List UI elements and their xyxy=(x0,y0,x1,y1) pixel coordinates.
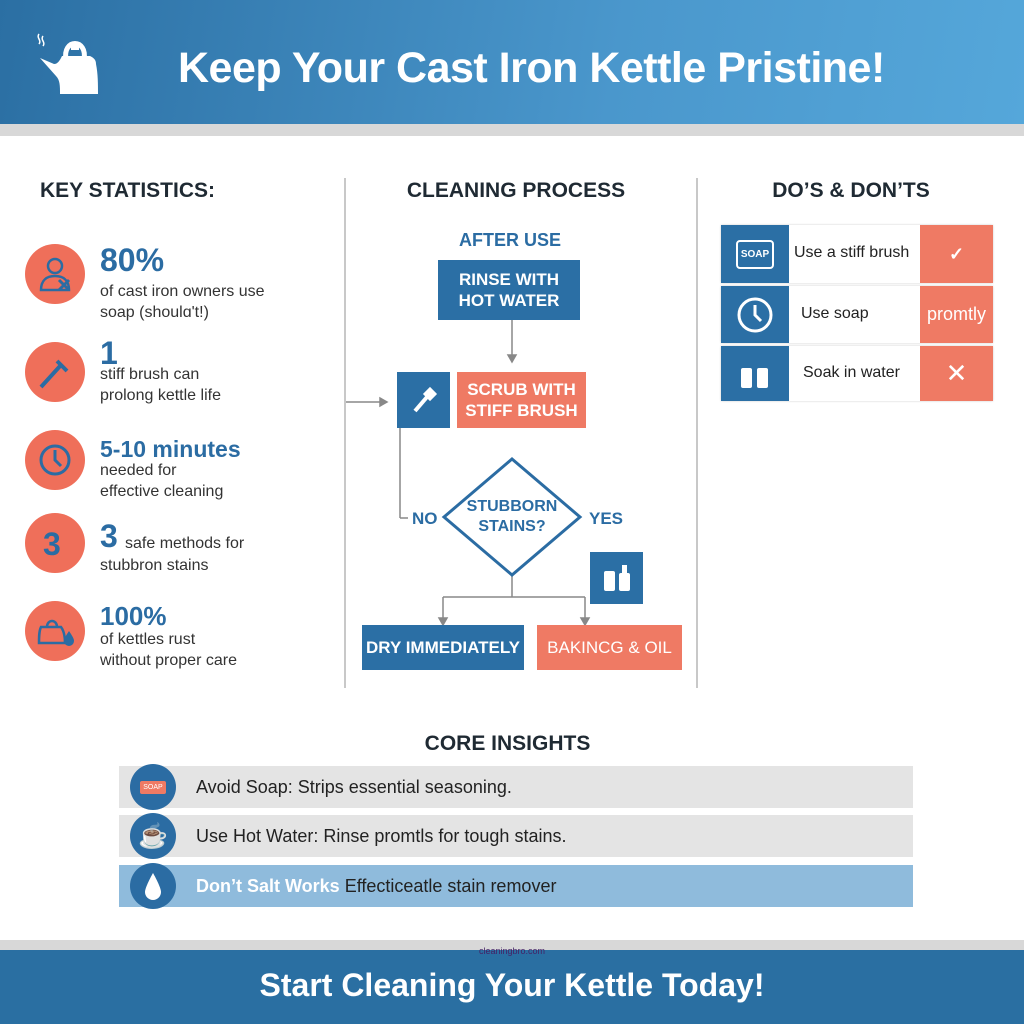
box: baking: BAKINCG & OIL xyxy=(547,638,672,657)
row 1: ✓ xyxy=(949,244,964,264)
stat 3: safe methods for xyxy=(125,535,244,552)
icon: drop xyxy=(130,863,176,909)
insight 3 xyxy=(119,865,913,907)
box: dry xyxy=(362,625,524,670)
stat 5-10 minutes: 5-10 minutes xyxy=(100,436,241,462)
stat 1: prolong kettle life xyxy=(100,387,221,404)
icon: soap xyxy=(130,764,176,810)
row 1: SOAP xyxy=(741,248,769,260)
diamond text xyxy=(467,498,557,535)
box: scrub: SCRUB WITH xyxy=(467,380,576,399)
heading: DO’S & DON’TS xyxy=(772,179,930,202)
box: dry: DRY IMMEDIATELY xyxy=(366,638,520,657)
watermark: cleaningbro.com xyxy=(479,946,545,956)
title: Keep Your Cast Iron Kettle Pristine! xyxy=(178,44,885,92)
stat 3: 3 xyxy=(43,526,61,562)
row 3: ✕ xyxy=(946,358,967,388)
box: scrub: STIFF BRUSH xyxy=(465,401,578,420)
stat 5-10 minutes: effective cleaning xyxy=(100,483,223,500)
decision diamond xyxy=(444,459,580,575)
stat 3: stubbron stains xyxy=(100,557,209,574)
stat 5-10 minutes xyxy=(25,430,241,500)
row 1 xyxy=(721,225,993,283)
stat 100%: 100% xyxy=(100,601,166,631)
icon: cup: ☕ xyxy=(138,822,168,850)
box: rinse xyxy=(438,260,580,320)
label no: NO xyxy=(412,509,438,528)
stat 100%: of kettles rust xyxy=(100,631,195,648)
panel: do's and don'ts xyxy=(720,179,994,402)
icon: kettle xyxy=(37,34,98,94)
row 3 xyxy=(721,346,993,401)
insight 1: Avoid Soap: Strips essential seasoning. xyxy=(196,776,512,796)
insight 3: Effecticeatle stain remover xyxy=(345,876,556,896)
insight 2 xyxy=(119,815,913,857)
heading: KEY STATISTICS: xyxy=(40,179,215,202)
stat 1: stiff brush can xyxy=(100,366,199,383)
box: baking xyxy=(537,625,682,670)
icon: bottles xyxy=(590,552,643,604)
stat 80% xyxy=(25,242,265,321)
row 3: Soak in water xyxy=(803,364,900,381)
stat 5-10 minutes: needed for xyxy=(100,462,177,479)
stat 80%: 80% xyxy=(100,242,164,278)
row 1: Use a stiff brush xyxy=(794,244,909,261)
box: rinse: HOT WATER xyxy=(459,291,559,310)
box: scrub xyxy=(397,372,586,428)
insight 3: Don’t Salt Works xyxy=(196,876,340,896)
stat 3 xyxy=(25,513,244,574)
stat 1: 1 xyxy=(100,335,118,371)
panel: key statistics: soap (shoulɑ't!) xyxy=(100,304,209,321)
insight 2: Use Hot Water: Rinse promtls for tough stains. xyxy=(196,826,566,846)
header xyxy=(0,0,1024,124)
stat 1 xyxy=(25,335,221,404)
footer text: Start Cleaning Your Kettle Today! xyxy=(260,967,764,1003)
footer xyxy=(0,940,1024,1024)
insight 1 xyxy=(119,766,913,808)
box: rinse: RINSE WITH xyxy=(459,270,559,289)
heading: CLEANING PROCESS xyxy=(407,179,625,202)
diamond text: STUBBORN xyxy=(467,498,557,515)
row 2: promtly xyxy=(927,304,986,324)
stat 100%: without proper care xyxy=(100,652,237,669)
heading: CORE INSIGHTS xyxy=(425,732,590,755)
stat 80%: of cast iron owners use xyxy=(100,283,265,300)
row 2: Use soap xyxy=(801,305,869,322)
stat 100% xyxy=(25,601,237,669)
stat 3: 3 xyxy=(100,518,118,554)
panel: cleaning process xyxy=(346,179,682,670)
row 2 xyxy=(721,286,993,343)
panel: key statistics xyxy=(25,179,265,669)
icon: cup xyxy=(130,813,176,859)
label yes: YES xyxy=(589,509,623,528)
icon: soap: SOAP xyxy=(143,784,163,790)
label: after use: AFTER USE xyxy=(459,230,561,250)
diamond text: STAINS? xyxy=(478,518,546,535)
